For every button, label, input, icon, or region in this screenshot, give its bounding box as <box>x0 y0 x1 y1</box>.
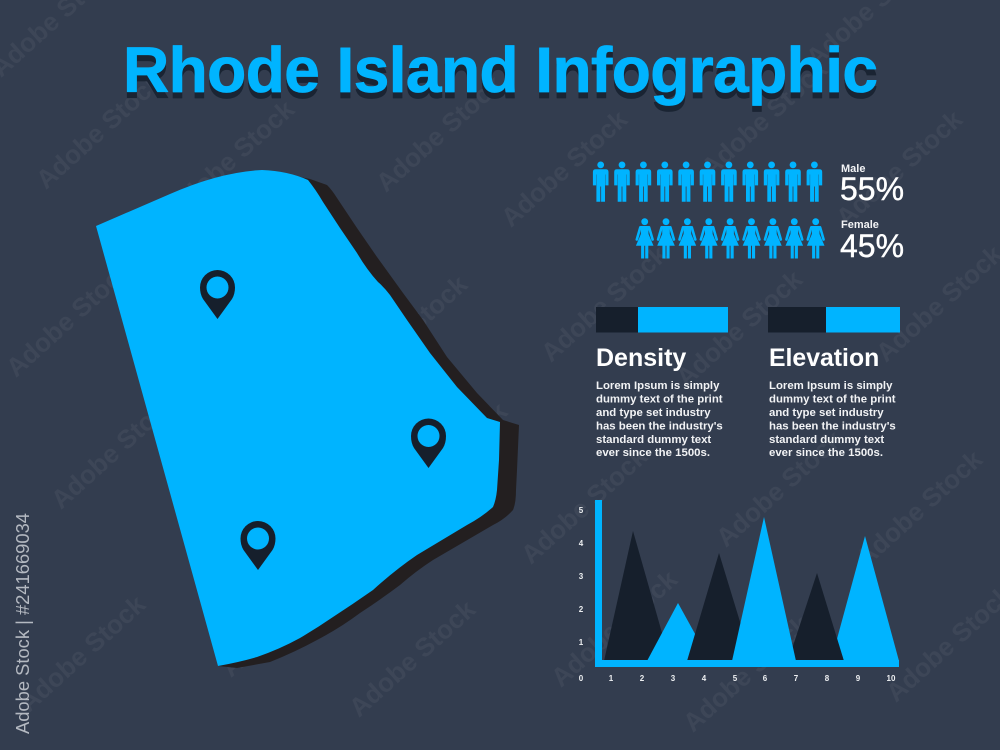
elevation bar <box>768 307 900 332</box>
x axis labels: 8 <box>825 674 830 683</box>
watermark pattern: Adobe Stock <box>13 589 151 718</box>
x axis labels: 3 <box>671 674 676 683</box>
watermark pattern: Adobe Stock <box>830 104 968 233</box>
watermark pattern: Adobe Stock <box>710 424 848 553</box>
elevation text: dummy text of the print <box>769 394 896 406</box>
chart axes <box>595 500 899 667</box>
male label: Male <box>841 163 865 175</box>
x axis labels: 1 <box>609 674 614 683</box>
elevation heading: Elevation <box>769 345 879 372</box>
watermark pattern: Adobe Stock <box>495 104 633 233</box>
male statistic <box>593 162 904 207</box>
y axis labels: 5 <box>579 506 584 515</box>
elevation text: and type set industry <box>769 407 884 419</box>
density text <box>596 380 723 459</box>
watermark pattern: Adobe Stock <box>173 424 311 553</box>
title: Rhode Island Infographic <box>123 34 878 106</box>
elevation text <box>769 380 896 459</box>
y axis labels: 4 <box>579 539 584 548</box>
watermark pattern: Adobe Stock <box>343 594 481 723</box>
watermark pattern: Adobe Stock <box>670 264 808 393</box>
density text: and type set industry <box>596 407 711 419</box>
area chart <box>579 500 899 683</box>
female statistic <box>636 218 904 264</box>
stock credit: Adobe Stock | #241669034 <box>13 513 33 734</box>
female icons <box>636 218 824 258</box>
density text: dummy text of the print <box>596 394 723 406</box>
title: Rhode Island Infographic <box>123 40 878 112</box>
watermark pattern: Adobe Stock <box>215 554 353 683</box>
x axis labels <box>609 674 896 683</box>
map: Rhode Island <box>96 170 519 668</box>
density bar <box>596 307 728 332</box>
watermark pattern: Adobe Stock <box>535 239 673 368</box>
map pin: east <box>411 418 446 468</box>
y axis labels: 0 <box>579 674 584 683</box>
panel: elevation <box>768 307 900 459</box>
watermark pattern: Adobe Stock <box>677 609 815 738</box>
density text: standard dummy text <box>596 434 711 446</box>
x axis labels: 9 <box>856 674 861 683</box>
y axis labels: 2 <box>579 605 584 614</box>
watermark pattern: Adobe Stock <box>370 69 508 198</box>
x axis labels: 6 <box>763 674 768 683</box>
elevation text: ever since the 1500s. <box>769 447 883 459</box>
x axis labels: 10 <box>887 674 896 683</box>
watermark pattern: Adobe Stock <box>45 386 183 515</box>
density heading: Density <box>596 344 686 372</box>
density text: Lorem Ipsum is simply <box>596 380 720 392</box>
watermark pattern: Adobe Stock <box>695 54 833 183</box>
watermark pattern: Adobe Stock <box>850 444 988 573</box>
x axis labels: 7 <box>794 674 799 683</box>
female label: Female <box>841 219 879 231</box>
x axis labels: 2 <box>640 674 645 683</box>
y axis labels <box>579 506 584 683</box>
elevation text: has been the industry's <box>769 420 896 432</box>
watermark pattern: Adobe Stock <box>162 94 300 223</box>
density text: has been the industry's <box>596 420 723 432</box>
male value: 55% <box>840 171 904 207</box>
map shadow <box>218 175 519 668</box>
elevation text: standard dummy text <box>769 434 884 446</box>
watermark pattern: Adobe Stock <box>375 396 513 525</box>
elevation text: Lorem Ipsum is simply <box>769 380 893 392</box>
watermark pattern: Adobe Stock <box>205 224 343 353</box>
watermark pattern: Adobe Stock <box>30 66 168 195</box>
x axis labels: 4 <box>702 674 707 683</box>
y axis labels: 1 <box>579 638 584 647</box>
map pin: north <box>200 270 235 319</box>
density text: ever since the 1500s. <box>596 447 710 459</box>
map shape <box>96 170 500 666</box>
female value: 45% <box>840 228 904 264</box>
panel: density <box>596 307 728 459</box>
watermark pattern: Adobe Stock <box>335 269 473 398</box>
x axis labels: 5 <box>733 674 738 683</box>
male icons <box>593 162 822 202</box>
watermark pattern: Adobe Stock <box>0 254 138 383</box>
watermark pattern: Adobe Stock <box>515 441 653 570</box>
chart triangles <box>604 517 899 661</box>
map pin: south <box>240 521 276 570</box>
y axis labels: 3 <box>579 572 584 581</box>
watermark pattern: Adobe Stock <box>545 564 683 693</box>
